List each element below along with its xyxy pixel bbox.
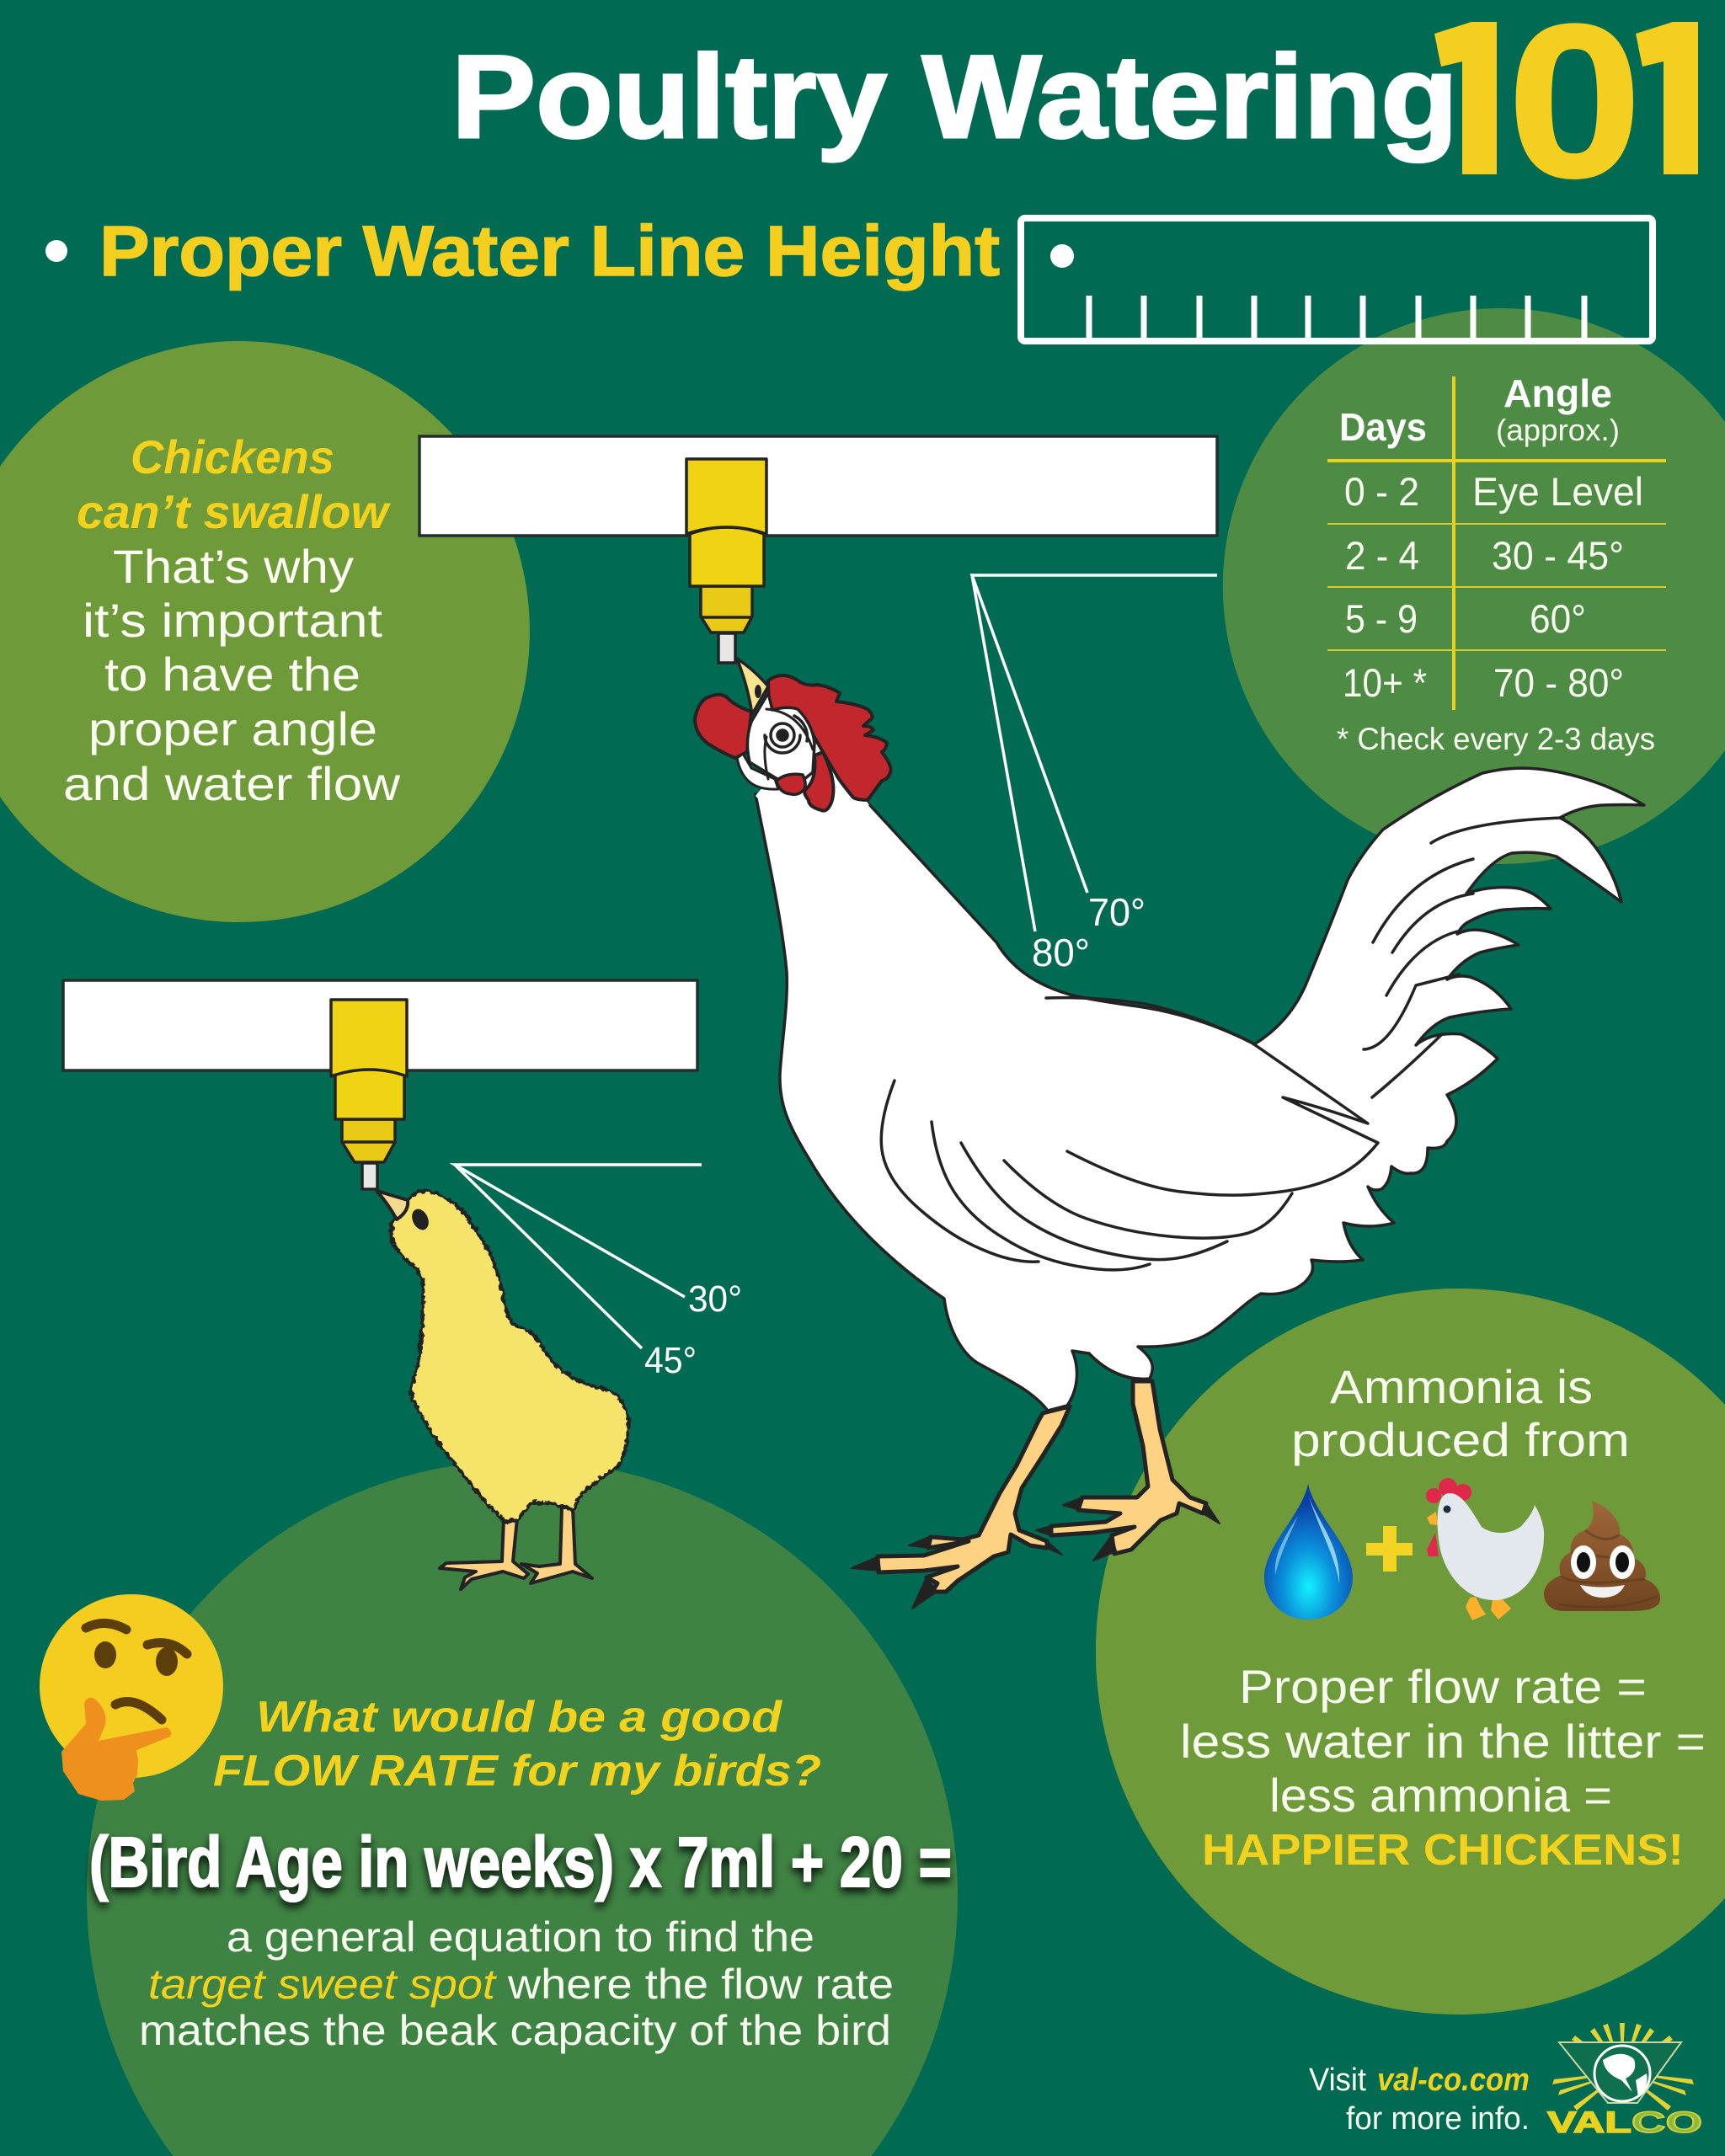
footer: website note: for more info. [1346, 2101, 1530, 2137]
icon: plus [1366, 1526, 1413, 1572]
icon: hen emoji [1426, 1478, 1544, 1620]
text block: flow rate benefits [1180, 1660, 1706, 1875]
text block: ammonia produced from: Ammonia is [1330, 1360, 1593, 1413]
labels: hen angles [1032, 890, 1146, 974]
title: Poultry Watering [451, 30, 1458, 163]
table: days and angle: 60° [1530, 596, 1586, 641]
table: days and angle: 70 - 80° [1493, 660, 1624, 705]
text block: chickens can't swallow: Chickens [131, 430, 334, 483]
water line bar: hen [419, 436, 1217, 536]
text block: flow rate benefits: less ammonia = [1269, 1769, 1612, 1822]
panel: age angle table circle [1223, 308, 1725, 864]
icon: thinking face emoji [40, 1594, 223, 1801]
illustration: hen [695, 659, 1644, 1609]
hen legs and feet [852, 1381, 1220, 1609]
heading: proper water line height: Proper Water Line Height [99, 211, 1000, 291]
panel: flow rate circle [87, 1460, 958, 2156]
logo: VAL-CO [1547, 2023, 1702, 2139]
text block: flow rate benefits: Proper flow rate = [1239, 1660, 1647, 1713]
footer: website note: val-co.com [1377, 2063, 1530, 2098]
text block: flow rate question [213, 1693, 821, 1796]
text block: ammonia produced from [1291, 1360, 1630, 1466]
footer: website note [1309, 2063, 1530, 2137]
text block: equation explanation: where the flow rate [507, 1961, 894, 2008]
table: days and angle: Angle [1503, 371, 1612, 415]
angle guide lines: chick [455, 1165, 702, 1348]
hen upper neck fill [756, 741, 869, 817]
icon: poop emoji [1544, 1501, 1660, 1611]
panel: chickens can't swallow circle [0, 341, 530, 922]
hen beak [737, 659, 768, 714]
table: days and angle: Days [1339, 405, 1427, 449]
text block: equation explanation: matches the beak capacity of the bird [139, 2007, 891, 2054]
labels: hen angles: 70° [1088, 890, 1146, 934]
text block: chickens can't swallow: That’s why [113, 540, 354, 593]
text block: flow rate benefits: less water in the litter = [1180, 1715, 1706, 1768]
table: days and angle [1327, 371, 1666, 756]
table: days and angle: * Check every 2-3 days [1337, 722, 1655, 756]
labels: chick angles [644, 1278, 742, 1381]
icon: ruler [1021, 218, 1653, 341]
text block: chickens can't swallow: and water flow [63, 757, 401, 810]
illustration: chick [377, 1191, 628, 1589]
logo: VAL-CO: CO [1632, 2106, 1702, 2139]
hen eye [765, 709, 813, 779]
hen body and tail [756, 768, 1644, 1411]
nipple drinker: hen [686, 459, 766, 663]
icon: water drop [1264, 1484, 1353, 1620]
logo: VAL-CO: VAL [1547, 2106, 1632, 2139]
hen neck frill [737, 754, 778, 789]
table: days and angle: Eye Level [1472, 469, 1643, 514]
chick eye [409, 1206, 432, 1233]
hen small wattle [777, 774, 805, 794]
labels: chick angles: 30° [688, 1278, 742, 1320]
labels: chick angles: 45° [644, 1340, 697, 1381]
text block: chickens can't swallow: to have the [104, 648, 360, 701]
hen wing and tail feather lines [881, 818, 1563, 1270]
table: days and angle: 30 - 45° [1492, 533, 1624, 578]
chick body [391, 1191, 628, 1521]
text block: flow rate benefits: HAPPIER CHICKENS! [1202, 1826, 1684, 1875]
text block: equation explanation [139, 1913, 894, 2054]
table: days and angle: 0 - 2 [1344, 469, 1419, 514]
hen comb and wattles [695, 675, 891, 811]
footer: website note: Visit [1309, 2063, 1366, 2098]
text block: chickens can't swallow: it’s important [83, 594, 382, 647]
text block: chickens can't swallow [63, 430, 401, 810]
angle guide lines: hen [972, 575, 1217, 931]
text block: chickens can't swallow: proper angle [88, 702, 377, 755]
chick legs and feet [440, 1508, 592, 1589]
chick beak [377, 1191, 408, 1219]
table: days and angle: 5 - 9 [1345, 596, 1418, 641]
hen face [747, 693, 814, 779]
text block: flow rate question: What would be a good [256, 1693, 782, 1742]
table: days and angle: 10+ * [1343, 660, 1427, 705]
text block: equation explanation: a general equation to find the [227, 1913, 814, 1961]
text block: flow rate question: FLOW RATE for my birds? [213, 1747, 821, 1796]
panel: ammonia circle [1096, 1289, 1725, 2015]
table: days and angle: 2 - 4 [1345, 533, 1419, 578]
water line bar: chick [63, 980, 697, 1070]
title number: 101 [1434, 22, 1698, 179]
nipple drinker: chick [331, 1000, 407, 1189]
text block: equation explanation: target sweet spot [148, 1961, 497, 2008]
table: days and angle: (approx.) [1496, 413, 1620, 447]
text block: chickens can't swallow: can’t swallow [77, 485, 392, 538]
text block: ammonia produced from: produced from [1291, 1413, 1630, 1466]
equation: (Bird Age in weeks) x 7ml + 20 = [89, 1822, 952, 1902]
labels: hen angles: 80° [1032, 931, 1090, 974]
